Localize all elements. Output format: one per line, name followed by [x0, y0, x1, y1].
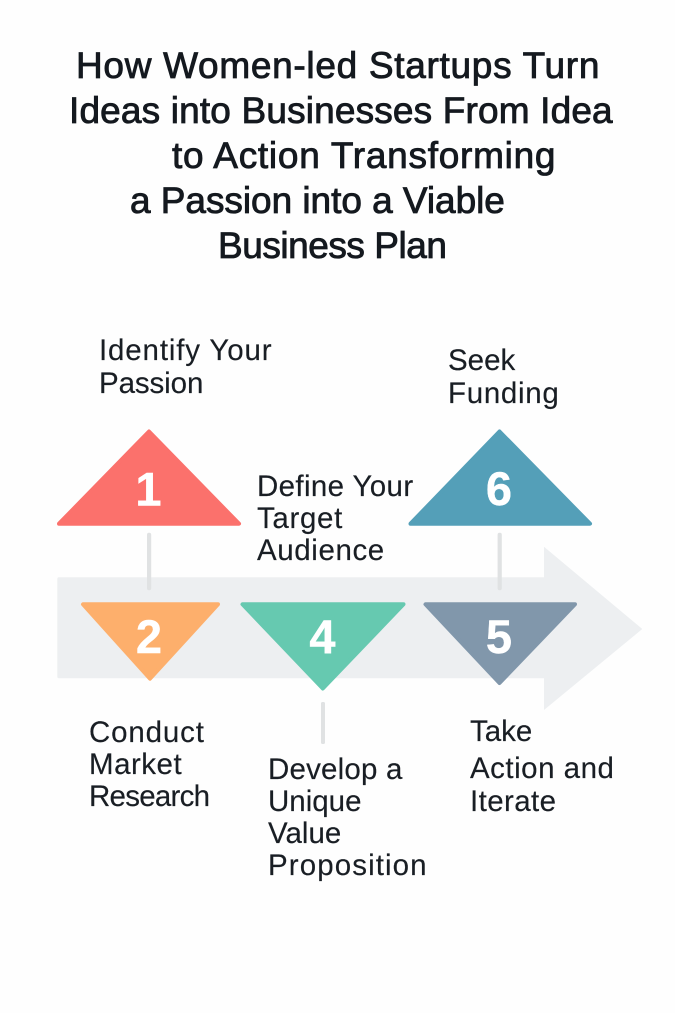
label: define your target audience: Target: [257, 502, 343, 535]
label: seek funding: Seek: [448, 344, 515, 377]
label: conduct market research: Conduct: [89, 716, 205, 749]
title: Business Plan: [218, 225, 446, 266]
label: define your target audience: Define Your: [257, 470, 414, 503]
label: take action and iterate: Action and: [470, 752, 614, 785]
label: develop a unique value proposition: Develop a: [268, 753, 403, 786]
label: define your target audience: [257, 470, 414, 567]
connector 4 to label: [321, 702, 325, 744]
label: seek funding: [448, 344, 560, 410]
arrow: background timeline: [57, 547, 642, 710]
label: identify your passion: Passion: [99, 367, 203, 400]
label: conduct market research: Market: [89, 748, 182, 781]
triangle 4: 4: [309, 610, 336, 663]
label: develop a unique value proposition: Unique: [268, 785, 361, 818]
label: define your target audience: Audience: [257, 534, 385, 567]
label: take action and iterate: Iterate: [470, 785, 556, 818]
label: take action and iterate: Take: [470, 715, 532, 748]
label: develop a unique value proposition: [268, 753, 428, 882]
label: develop a unique value proposition: Value: [268, 817, 341, 850]
triangle 1: [59, 432, 239, 524]
triangle 6: 6: [486, 462, 512, 515]
triangle 5: [426, 604, 575, 683]
connector 1 to 2: [147, 533, 151, 590]
label: develop a unique value proposition: Proposition: [268, 849, 428, 882]
label: identify your passion: Identify Your: [99, 334, 272, 367]
label: conduct market research: [89, 716, 209, 813]
label: identify your passion: [99, 334, 272, 400]
title: [69, 45, 613, 266]
triangle 2: [83, 604, 218, 679]
title: to Action Transforming: [172, 135, 556, 176]
label: seek funding: Funding: [448, 377, 560, 410]
triangle 1: 1: [135, 462, 162, 516]
triangle 6: [410, 432, 590, 524]
label: take action and iterate: [470, 715, 614, 818]
title: a Passion into a Viable: [130, 180, 505, 221]
connector 6 to 5: [498, 533, 502, 590]
triangle 2: 2: [136, 610, 162, 663]
title: Ideas into Businesses From Idea: [69, 90, 613, 131]
title: How Women-led Startups Turn: [76, 45, 600, 86]
triangle 5: 5: [486, 610, 512, 663]
triangle 4: [242, 604, 404, 688]
label: conduct market research: Research: [89, 780, 209, 813]
